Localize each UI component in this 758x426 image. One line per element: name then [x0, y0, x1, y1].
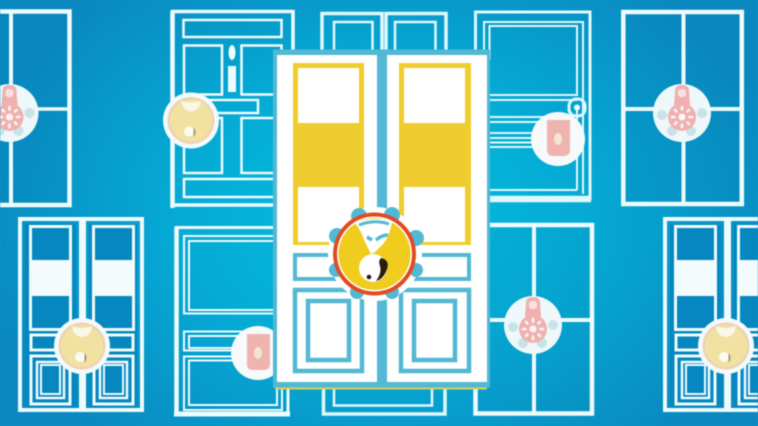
left door leaf [277, 55, 377, 382]
icon: yellow badge, top panel door [163, 92, 219, 148]
right door leaf [387, 55, 487, 382]
panel: central double door [273, 50, 490, 390]
icon: pink lock badge, top-right door [531, 112, 585, 166]
door: top centre double door [322, 14, 446, 414]
icon: yellow badge, far-right double door [698, 318, 754, 374]
icon: yellow badge, bottom-left double door [54, 318, 110, 374]
icon: lock badge, bottom-right window door [504, 296, 562, 354]
door: top-right door with keyhole [476, 12, 591, 200]
door: bottom-right window door [475, 225, 592, 414]
icon: pink lock badge, bottom panel door [231, 326, 285, 380]
door: top-right window door [623, 12, 742, 204]
top notch [355, 219, 392, 254]
icon: lock badge, top-left [0, 84, 38, 142]
icon: lock badge, top-right window door [653, 84, 711, 142]
yin-yang [359, 254, 387, 282]
door: bottom far-right double door [665, 219, 758, 410]
door: top-left window door [0, 11, 70, 205]
icon: central lock badge [328, 207, 424, 301]
door: bottom-left double door [20, 219, 142, 410]
gear petals [329, 207, 424, 299]
door: top panel door with handle [172, 11, 293, 208]
door: bottom panel door [174, 227, 290, 416]
